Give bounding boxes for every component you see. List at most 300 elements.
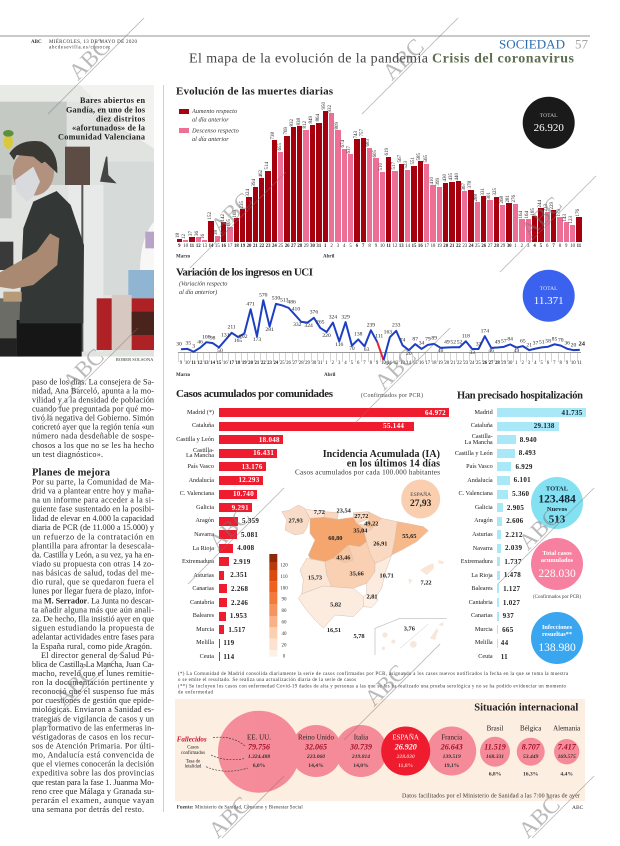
chart: hospitalised by region: 1.737 [504, 558, 522, 566]
chart: hospitalised by region: Castilla- [472, 433, 493, 440]
chart: daily deaths bars: 38 [214, 230, 219, 235]
article text: paso de los días. La consejera de Sa- [32, 378, 154, 387]
confirmed cases: 53.449 [523, 754, 539, 760]
left key with arrows: letalidad [185, 765, 202, 770]
chart: daily deaths day axis: 5 [540, 244, 542, 249]
photo caption: Bares abiertos en [80, 96, 145, 105]
map values: 27,93 [289, 518, 303, 525]
chart: daily deaths bars: 462 [259, 170, 264, 177]
ICU value labels: 51 [539, 339, 545, 345]
ICU value labels: 46 [197, 340, 203, 346]
chart: accumulated cases by region: 10.740 [233, 490, 254, 498]
map values: 3,76 [404, 625, 415, 632]
Spain incidence circle: ESPAÑA [410, 490, 431, 498]
ICU value labels: 410 [292, 307, 300, 313]
chart: daily deaths day axis: 15 [412, 244, 416, 249]
chart: daily deaths day axis: 5 [349, 244, 352, 249]
chart: daily deaths bars: 812 [303, 121, 308, 129]
credit ABC: ABC [572, 805, 584, 811]
incidence colour scale: 0 [283, 654, 286, 659]
ICU value labels: 37 [533, 341, 538, 347]
chart: hospitalised by region: Asturias [472, 531, 493, 538]
chart: accumulated cases by region: C. Valenciana [180, 490, 214, 497]
header: newspaper and date: ABC [31, 40, 42, 45]
chart: daily deaths day axis: 9 [565, 244, 567, 249]
map values: 43,46 [336, 554, 350, 561]
chart: accumulated cases by region: La Rioja [193, 544, 214, 552]
heading: ICU admissions: Variación de los ingresos en UCI [176, 266, 313, 278]
chart: accumulated cases by region [176, 408, 449, 661]
chart: daily deaths bars: 152 [208, 212, 213, 220]
chart: ICU day axis: 24 [273, 361, 278, 366]
Spain incidence circle [401, 480, 440, 518]
chart: daily deaths bars: 185 [531, 208, 536, 215]
incidence colour scale: 20 [282, 643, 287, 648]
chart: hospitalised by region: Extremadura [461, 558, 493, 565]
lethality rate: 16,3% [523, 771, 539, 777]
waiter figure [0, 141, 84, 357]
lethality rate: 6,0% [253, 763, 266, 769]
ICU value labels: 220 [322, 333, 331, 339]
chart: daily deaths day axis: 13 [202, 244, 207, 249]
chart: daily deaths bars: 510 [379, 163, 384, 171]
article text: reconoció que el suspenso fue más [32, 687, 154, 696]
chart: hospitalised by region: 2.606 [506, 517, 523, 525]
chart: daily deaths day axis: 3 [527, 244, 529, 249]
confirmed cases: 168.331 [486, 754, 504, 760]
confirmed cases: 219.814 [351, 754, 370, 760]
chart: ICU day axis: 12 [394, 361, 399, 366]
chart: ICU day axis: 26 [482, 361, 487, 366]
chart: daily deaths bars: 738 [271, 132, 276, 139]
chart: accumulated cases by region: 5.081 [241, 531, 258, 539]
chart: daily deaths day axis: 11 [386, 244, 391, 249]
photo credit: ROBER SOLSONA [116, 357, 154, 362]
chart: daily deaths bars: 674 [341, 140, 346, 148]
chart: ICU day axis: 19 [438, 361, 443, 366]
ICU value labels: 74 [400, 337, 405, 343]
lethality rate: 14,4% [308, 763, 324, 769]
chart: daily deaths bars: 394 [252, 179, 257, 186]
chart: daily deaths day axis: 6 [356, 244, 358, 249]
deaths: 8.707 [522, 742, 541, 752]
chart: ICU day axis: 5 [351, 361, 353, 366]
chart: ICU day axis: 2 [332, 361, 334, 366]
page header [0, 36, 590, 66]
deaths: 79.756 [248, 742, 270, 752]
article text: mo, Andalucía está convencida de [32, 751, 154, 760]
page title: Crisis del coronavirus [432, 52, 575, 66]
ICU value labels [176, 292, 585, 367]
chart: accumulated cases by region: 18.048 [259, 436, 280, 444]
chart: accumulated cases by region: 114 [223, 653, 234, 661]
chart: daily deaths day axis: 20 [443, 244, 448, 249]
chart: daily deaths bars: 743 [354, 131, 359, 138]
ICU value labels: 530 [272, 296, 280, 302]
chart: hospitalised by region: Andalucía [467, 477, 493, 484]
ICU value labels: 52 [450, 339, 456, 345]
article text: tivó la negativa del Gobierno. Simón [32, 414, 154, 423]
country names: Bélgica [520, 725, 542, 733]
ICU line [180, 299, 580, 361]
chart: daily deaths day axis: 10 [183, 244, 188, 249]
map values: 27,72 [354, 513, 368, 520]
chart: ICU day axis: 14 [406, 361, 411, 366]
ICU value labels: 111 [375, 334, 383, 340]
chart: daily deaths day axis: 3 [337, 244, 339, 249]
months: ICU chart [176, 373, 336, 378]
ICU value labels: 35 [186, 341, 191, 347]
chart: daily deaths bars: 517 [392, 162, 397, 170]
chart: ICU day axis: 13 [400, 361, 405, 366]
photo caption: Gandía, en uno de los [66, 105, 145, 114]
lethality rate [253, 763, 573, 777]
chart: ICU day axis: 6 [547, 361, 549, 366]
chart: daily deaths bars: 410 [430, 177, 435, 184]
chart: daily deaths bars: 378 [468, 181, 473, 189]
months: deaths chart: Abril [323, 254, 335, 260]
chart: hospitalised by region: Castilla y León [455, 450, 493, 457]
note under total cases: (Confirmados por PCR) [533, 595, 581, 600]
chart: hospitalised by region: Canarias [471, 612, 493, 619]
chart: ICU day axis: 19 [242, 361, 247, 366]
incidence colour scale: 120 [280, 564, 288, 569]
chart: ICU day axis: 23 [463, 361, 468, 366]
ICU subtitle: (Variación respecto [179, 280, 227, 288]
confirmed cases [248, 754, 576, 760]
total ICU circle: 11.371 [534, 295, 564, 307]
chart: daily deaths day axis: 23 [462, 244, 467, 249]
ICU value labels: 173 [253, 337, 261, 343]
chart: ICU day axis: 10 [185, 361, 190, 366]
article text: diaria de PCR (de 11.000 a 15.000) y [32, 523, 155, 532]
chart: daily deaths bars: 169 [233, 210, 238, 217]
chart: accumulated cases by region: Extremadura [182, 558, 214, 565]
chart: daily deaths bars: 276 [512, 195, 517, 203]
chart: ICU day axis: 28 [299, 361, 304, 366]
article text: por cuestiones de gestión que epide- [32, 696, 154, 705]
country names: EE. UU. [247, 733, 271, 741]
ICU value labels: 163 [384, 329, 392, 335]
chart: accumulated cases by region: 2.246 [231, 599, 248, 607]
chart: ICU day axis: 9 [566, 361, 568, 366]
ICU value labels: 116 [335, 342, 343, 348]
article text: perarán el examen, aunque vayan [32, 796, 154, 805]
chart: ICU day axis: 29 [501, 361, 506, 366]
left key with arrows: Fallecidos [177, 736, 207, 744]
chart: daily deaths day axis: 8 [368, 244, 371, 249]
confirmed cases: 1.324.488 [248, 754, 270, 760]
map values: 26,91 [373, 540, 387, 547]
chart: daily deaths bars: 235 [240, 201, 245, 208]
ICU value labels: 58 [545, 339, 551, 345]
chart: hospitalised by region: 2.212 [505, 531, 523, 539]
country names: Brasil [487, 725, 503, 733]
chart: hospitalised by region: C. Valenciana [458, 490, 493, 497]
ICU subtitle: al día anterior) [179, 289, 217, 296]
left key with arrows: Casos [187, 746, 199, 750]
chart: daily deaths bars: 324 [246, 189, 251, 196]
chart: daily deaths bars: 325 [493, 188, 498, 196]
map values: 15,73 [308, 574, 322, 581]
chart: daily deaths bars: 523 [404, 161, 409, 169]
chart: daily deaths day axis: 14 [209, 244, 213, 249]
chart: accumulated cases by region: Baleares [193, 612, 214, 619]
chart: daily deaths day axis: 21 [253, 244, 258, 249]
ICU value labels: 33 [469, 350, 475, 356]
article text: la España rural, como pide Aragón. [32, 642, 152, 651]
chart: daily deaths bars: 288 [474, 194, 479, 201]
country names: Francia [441, 733, 463, 741]
chart: daily deaths bars: 809 [335, 122, 340, 129]
chart: daily deaths day axis: 29 [500, 244, 505, 249]
chart: daily deaths day axis: 19 [240, 244, 245, 249]
article text: cuando fue preguntada por qué mo- [32, 405, 154, 414]
chart: accumulated cases by region: 4.008 [237, 544, 254, 552]
deaths [248, 742, 577, 752]
heading: cumulative incidence [295, 449, 440, 476]
article text: ta añadir alguna más que aún anali- [32, 606, 154, 614]
chart: ICU day axis: 4 [534, 361, 537, 366]
article text: dio rural, que se quedaron fuera el [32, 578, 155, 587]
chart: accumulated cases by region: 16.431 [253, 449, 274, 457]
ICU value labels: 202 [239, 334, 247, 340]
chart: hospitalised by region: 665 [502, 626, 514, 634]
resolved infections circle [531, 612, 583, 664]
chart: daily deaths bars: 950 [322, 102, 327, 110]
article text: da. Castilla y León, a su vez, ya ha en- [32, 550, 154, 559]
ICU value labels: 233 [392, 323, 400, 329]
chart: daily deaths bars: 244 [538, 200, 543, 207]
chart: ICU day axis: 10 [571, 361, 576, 366]
country names [247, 725, 581, 741]
chart: hospitalised by region: 8.940 [520, 436, 537, 444]
chart: daily deaths day axis: 29 [304, 244, 309, 249]
chart: ICU day axis: 9 [376, 361, 378, 366]
chart: daily deaths day axis: 26 [285, 244, 290, 249]
chart: ICU day axis: 27 [292, 361, 297, 366]
ICU value labels: 70 [558, 338, 564, 344]
country names: Italia [354, 733, 369, 741]
left key with arrows: Tasa de [186, 759, 200, 764]
article text: nidad, Ana Barceló, apunta a la mo- [32, 387, 154, 396]
ICU value labels: 265 [316, 320, 324, 326]
chart: ICU day axis: 1 [515, 361, 518, 366]
confirmed cases: 228.030 [396, 754, 415, 760]
photo caption: Comunidad Valenciana [58, 133, 145, 142]
chart: daily deaths bars: 399 [436, 178, 441, 186]
chart: daily deaths bars: 832 [290, 119, 295, 126]
chart: daily deaths day axis: 7 [552, 244, 555, 249]
header: newspaper and date: abcdesevilla.es/conocer [49, 46, 110, 50]
chart: daily deaths day axis: 24 [469, 244, 473, 249]
chart: ICU day axis [180, 360, 582, 366]
chart: daily deaths day axis: 11 [190, 244, 194, 249]
ICU value labels: 79 [425, 337, 431, 343]
article text: que restan para la fase 1. Juanma Mo- [32, 778, 154, 787]
chart: accumulated cases by region: Asturias [193, 572, 214, 579]
footnotes: o se emite el resultado. Se realiza una actualización diaria de la serie de casos [178, 678, 356, 683]
map values: 55,65 [402, 533, 416, 540]
chart: ICU day axis: 30 [508, 361, 512, 366]
map values: 7,72 [314, 509, 325, 516]
chart: daily deaths bars: 142 [220, 214, 226, 221]
chart: hospitalised by region: 1.478 [504, 571, 521, 579]
chart: daily deaths bars: 619 [385, 148, 390, 156]
heading: cumulative incidence: Incidencia Acumulada (IA) [323, 449, 440, 460]
footnotes [178, 672, 569, 696]
article text: concretó ayer que la región tenía «un [32, 423, 154, 432]
chart: accumulated cases by region: Canarias [192, 585, 214, 592]
chart: daily deaths bars: 18 [176, 233, 181, 238]
data note: Datos facilitados por el Ministerio de Sanidad a las 7:00 horas de ayer [402, 792, 580, 799]
map values: 5,82 [330, 602, 341, 609]
map values: 35,66 [350, 570, 364, 577]
ICU value labels: 46 [438, 348, 443, 354]
legend: daily deaths: al día anterior [192, 116, 229, 124]
chart: hospitalised by region: País Vasco [466, 463, 493, 470]
chart: daily deaths bars: 585 [417, 153, 422, 160]
hospital total circle: TOTAL [546, 486, 569, 492]
chart: daily deaths day axis: 1 [514, 244, 517, 249]
lethality rate: 4,4% [560, 771, 573, 777]
chart: hospitalised by region: Melilla [475, 639, 493, 646]
chart: ICU day axis: 11 [387, 361, 392, 366]
chart: daily deaths bars: 514 [265, 162, 270, 170]
ICU value labels: 70 [349, 346, 355, 352]
ICU value labels: 324 [304, 323, 313, 329]
deaths: 30.739 [349, 742, 372, 752]
ICU value labels: 34 [419, 341, 424, 347]
ICU value labels: 324 [329, 314, 337, 320]
chart: hospitalised by region: Murcia [475, 626, 493, 633]
ICU value labels: 239 [367, 322, 375, 328]
chart: daily deaths day axis: 8 [559, 244, 561, 249]
chart: ICU day axis: 3 [338, 361, 340, 366]
ICU value labels: 63 [364, 347, 369, 353]
Spain incidence circle: 27,93 [410, 499, 432, 509]
deaths: 26.920 [394, 742, 417, 752]
chart: daily deaths day axis: 25 [278, 244, 283, 249]
photo caption [58, 96, 145, 142]
chart: hospitalised by region: 1.027 [503, 599, 520, 607]
chart: daily deaths bars: 864 [316, 114, 321, 122]
chart: ICU day axis: 9 [180, 361, 182, 366]
chart: daily deaths bars: 605 [373, 150, 378, 157]
ICU value labels: 85 [552, 336, 557, 342]
chart: daily deaths bars: 164 [525, 211, 530, 218]
legend: daily deaths [179, 108, 239, 143]
chart: daily deaths day axis: 19 [437, 244, 442, 249]
ICU subtitle [179, 280, 227, 296]
ICU value labels: 513 [280, 297, 288, 303]
chart: ICU day axis: 15 [413, 361, 418, 366]
chart: daily deaths bars: 281 [506, 195, 511, 202]
chart: daily deaths day axis: 15 [215, 244, 220, 249]
chart: accumulated cases by region: 9.291 [232, 504, 249, 512]
chart: daily deaths day axis: 18 [234, 244, 239, 249]
chart: daily deaths day axis: 4 [343, 244, 345, 249]
chart: ICU day axis: 5 [540, 361, 543, 366]
article text [32, 378, 155, 814]
chart: ICU day axis: 17 [425, 361, 430, 366]
article text: vestigadoras de casos en los recur- [32, 732, 154, 742]
article text: siguen estudiando la propuesta de [32, 624, 154, 633]
ICU value labels: 46 [488, 348, 494, 354]
chart: daily deaths day axis: 2 [521, 244, 523, 249]
chart: hospitalised by region: 1.127 [503, 585, 520, 593]
chart: ICU day axis: 18 [432, 361, 436, 366]
chart: ICU day axis: 7 [553, 361, 556, 366]
panel heading: Situación internacional [474, 702, 578, 714]
article text: ron la documentación pertinente y [32, 678, 155, 687]
chart: daily deaths bars: 16 [201, 234, 206, 238]
deaths: 7.417 [558, 742, 577, 752]
months: deaths chart: Marzo [176, 254, 191, 260]
chart: accumulated cases by region: 12.293 [238, 476, 260, 484]
ICU value labels: 98 [210, 335, 215, 341]
map values: 2,81 [366, 593, 378, 600]
chart: ICU day axis: 25 [476, 361, 481, 366]
article text: na un informe para acceder a la si- [32, 496, 154, 505]
chart: daily deaths bars: 435 [449, 173, 454, 181]
chart: daily deaths bars: 123 [569, 216, 574, 224]
chart: hospitalised by region: La Mancha [465, 439, 493, 446]
article text: adelantar actividades entre fases para [32, 633, 154, 642]
ICU value labels: 50 [217, 348, 223, 354]
chart: ICU day axis: 28 [495, 361, 500, 366]
chart: daily deaths day axis: 9 [375, 244, 377, 249]
total ICU circle [523, 270, 575, 322]
chart: daily deaths day axis: 20 [247, 244, 251, 249]
footnotes: (*) La Comunidad de Madrid consolida diariamente la serie de casos confirmados por PCR, asignando a los casos nuevos notificados la fecha en la que se toma la muestra [178, 672, 569, 677]
ICU value labels: 211 [228, 325, 236, 331]
chart: ICU day axis: 18 [236, 361, 240, 366]
hospital total circle: 123.484 [538, 494, 576, 506]
chart: daily deaths bars: 637 [347, 146, 352, 153]
incidence colour scale [269, 554, 288, 659]
photo caption: «afortunados» de la [72, 124, 145, 133]
section name and page number: 57 [575, 36, 588, 52]
chart: daily deaths day axis: 10 [570, 244, 575, 249]
left key with arrows [177, 736, 248, 771]
ICU value labels: 165 [234, 338, 242, 344]
chart: ICU day axis: 21 [254, 361, 259, 366]
article text: El director general de Salud Pú- [41, 651, 154, 660]
article text: guiente fase sustentado en la posibi- [32, 505, 154, 514]
chart: accumulated cases by region: 119 [223, 639, 234, 647]
chart: daily deaths day axis: 27 [291, 244, 296, 249]
lethality rate: 19,1% [444, 763, 460, 769]
lethality rate: 11,8% [398, 763, 414, 769]
chart: hospitalised by region: 937 [503, 612, 514, 620]
chart: accumulated cases by region: La Mancha [186, 452, 214, 459]
photo: waiter wearing a mask in a bar [0, 85, 154, 357]
heading: cumulative incidence: Casos acumulados por cada 100.000 habitantes [295, 468, 440, 476]
deaths: 11.519 [484, 742, 506, 752]
resolved infections circle: Infecciones [542, 624, 573, 631]
chart: accumulated cases by region: 2.268 [231, 585, 248, 593]
total ICU circle: TOTAL [540, 286, 558, 292]
chart: hospitalised by region: Ceuta [478, 653, 493, 660]
chart: ICU day axis: 24 [470, 361, 474, 366]
chart: accumulated cases by region: 2.919 [233, 558, 251, 566]
chart: accumulated cases by region: Ceuta [200, 653, 214, 660]
months: ICU chart: Marzo [176, 373, 191, 378]
chart: daily deaths day axis: 28 [494, 244, 499, 249]
chart: accumulated cases by region: 64.972 [425, 409, 446, 417]
ICU value labels: 332 [293, 322, 301, 328]
